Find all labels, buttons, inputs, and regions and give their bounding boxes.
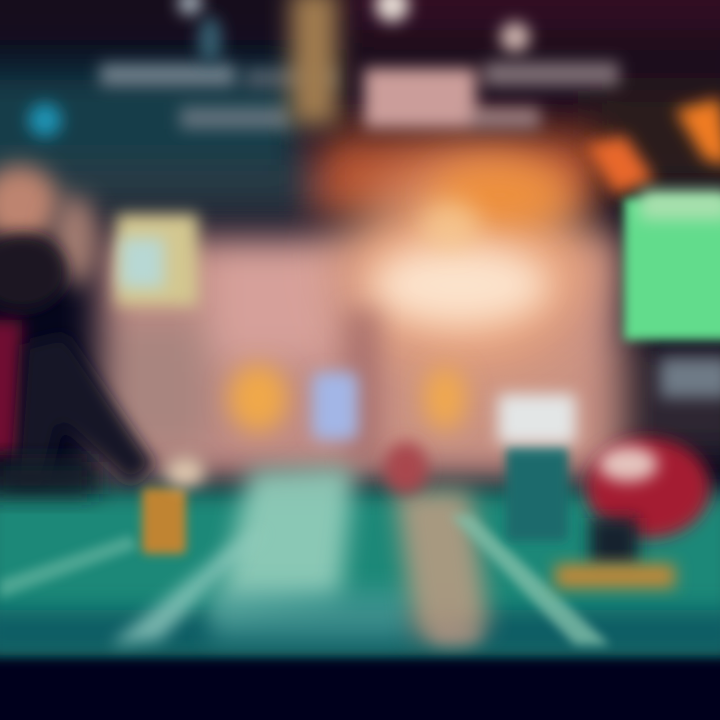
blurred banner text at top bbox=[100, 62, 619, 129]
bottom band bbox=[0, 660, 720, 720]
wall lights bbox=[228, 364, 467, 440]
floor: teal lanes bbox=[0, 465, 720, 655]
left drink glass bbox=[142, 457, 205, 554]
left screen bbox=[116, 214, 198, 306]
central glow bbox=[345, 160, 595, 460]
right red figure bbox=[555, 438, 710, 588]
orange ceiling lights bbox=[585, 98, 720, 195]
background: ceiling and upper wall bbox=[0, 0, 720, 215]
ceiling lights and column bbox=[28, 0, 530, 137]
left figure bbox=[0, 165, 155, 494]
right glass bbox=[498, 394, 576, 541]
centre ball bbox=[384, 442, 428, 494]
right green screen bbox=[624, 190, 720, 398]
background: pink wall bbox=[100, 235, 720, 480]
